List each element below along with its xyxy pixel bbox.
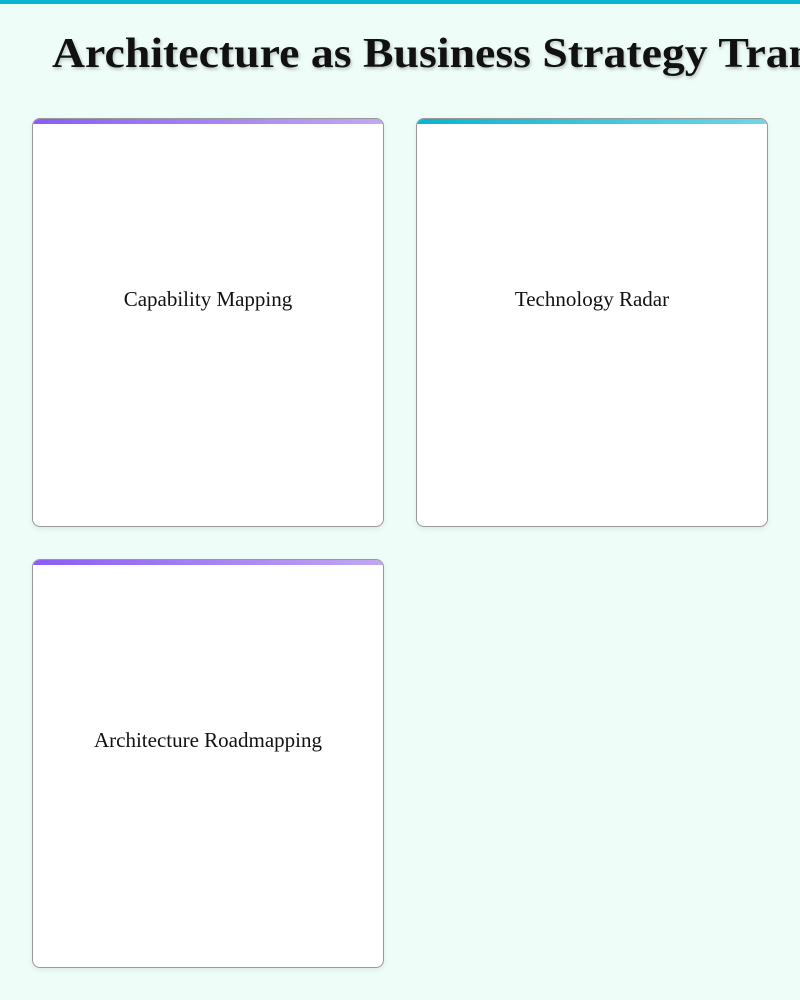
label: architecture roadmapping: Architecture Roadmapping [94, 728, 322, 752]
label: capability mapping: Capability Mapping [124, 287, 292, 311]
panel: capability mapping [32, 118, 384, 527]
panel: technology radar [416, 118, 768, 527]
panel: architecture roadmapping [32, 559, 384, 968]
label: technology radar: Technology Radar [515, 287, 669, 311]
